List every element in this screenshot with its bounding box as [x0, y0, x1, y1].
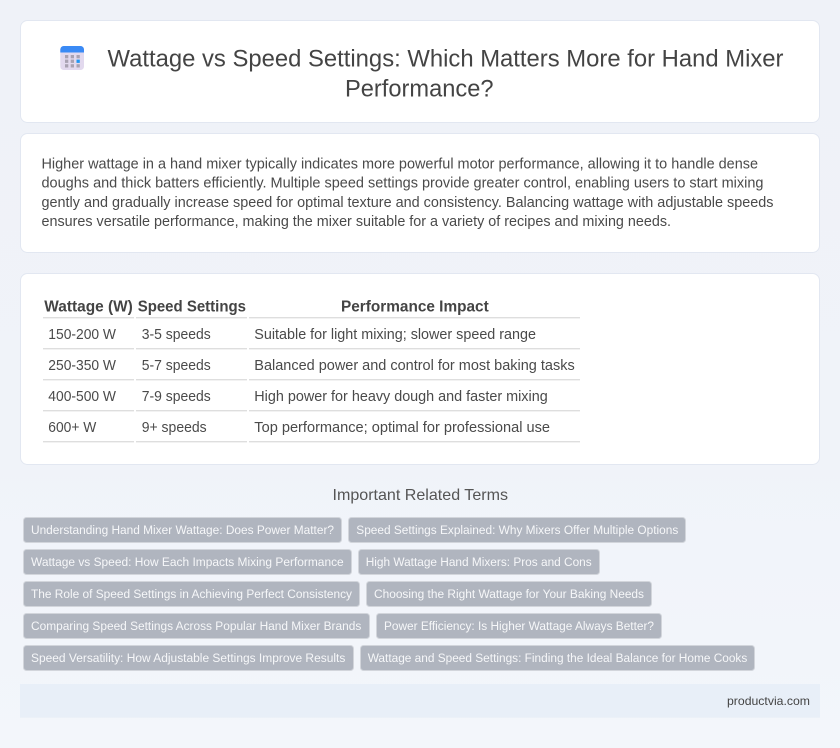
text block: summary: gently and gradually increase speed for optimal texture and consistency. Balancing wattage with adjustable speeds	[42, 195, 774, 211]
table header: Performance Impact	[341, 299, 489, 316]
table row: 250-350 W: 5-7 speeds	[142, 358, 211, 374]
table row: 400-500 W: High power for heavy dough and faster mixing	[254, 389, 548, 405]
footer	[20, 684, 820, 718]
panel: related term tags: Comparing Speed Settings Across Popular Hand Mixer Brands	[31, 619, 361, 633]
panel: related term tags: Choosing the Right Wattage for Your Baking Needs	[374, 587, 644, 601]
title	[108, 46, 784, 102]
table row: 600+ W: 9+ speeds	[142, 420, 207, 436]
panel: related term tags: Speed Versatility: How Adjustable Settings Improve Results	[31, 651, 345, 665]
table row: 250-350 W	[48, 358, 575, 374]
table row: 150-200 W: 150-200 W	[48, 327, 116, 343]
text block: summary	[42, 156, 774, 230]
table row: 150-200 W	[48, 327, 536, 343]
table row: 400-500 W	[48, 389, 548, 405]
panel: comparison table	[20, 274, 820, 464]
panel: related term tags: Speed Settings Explained: Why Mixers Offer Multiple Options	[356, 523, 678, 537]
table header	[44, 299, 489, 316]
table row: 250-350 W: Balanced power and control for most baking tasks	[254, 358, 575, 374]
table row: 250-350 W: 250-350 W	[48, 358, 116, 374]
table row: 600+ W: Top performance; optimal for professional use	[254, 420, 550, 436]
text block: summary: ensures versatile performance, making the mixer suitable for a variety of recipes and mixing needs.	[42, 214, 671, 230]
heading: related terms: Important Related Terms	[332, 487, 508, 504]
panel: related term tags: High Wattage Hand Mixers: Pros and Cons	[366, 555, 592, 569]
panel: related term tags: Wattage vs Speed: How Each Impacts Mixing Performance	[31, 555, 344, 569]
title: Wattage vs Speed Settings: Which Matters More for Hand Mixer	[108, 46, 784, 73]
panel: related term tags: The Role of Speed Settings in Achieving Perfect Consistency	[31, 587, 353, 601]
title: Performance?	[345, 76, 494, 102]
table header: Wattage (W)	[44, 299, 133, 316]
table row: 400-500 W: 400-500 W	[48, 389, 116, 405]
panel: related term tags	[24, 518, 754, 670]
table row: 600+ W: 600+ W	[48, 420, 97, 436]
table row: 600+ W	[48, 420, 550, 436]
panel: title card	[20, 20, 820, 122]
panel: summary paragraph	[20, 134, 820, 252]
footer: productvia.com	[727, 694, 810, 708]
table row: 150-200 W: 3-5 speeds	[142, 327, 211, 343]
table row: 150-200 W: Suitable for light mixing; slower speed range	[254, 327, 536, 343]
text block: summary: Higher wattage in a hand mixer typically indicates more powerful motor performance, allowing it to handle dense	[42, 156, 758, 172]
table row: 400-500 W: 7-9 speeds	[142, 389, 211, 405]
text block: summary: doughs and thick batters efficiently. Multiple speed settings provide greater control, enabling users to start mixing	[42, 176, 764, 192]
panel: related term tags: Wattage and Speed Settings: Finding the Ideal Balance for Home Cooks	[368, 651, 747, 665]
panel: related term tags: Power Efficiency: Is Higher Wattage Always Better?	[384, 619, 654, 633]
panel: related term tags: Understanding Hand Mixer Wattage: Does Power Matter?	[31, 523, 334, 537]
table header: Speed Settings	[138, 299, 246, 316]
icon: calendar	[60, 46, 84, 70]
